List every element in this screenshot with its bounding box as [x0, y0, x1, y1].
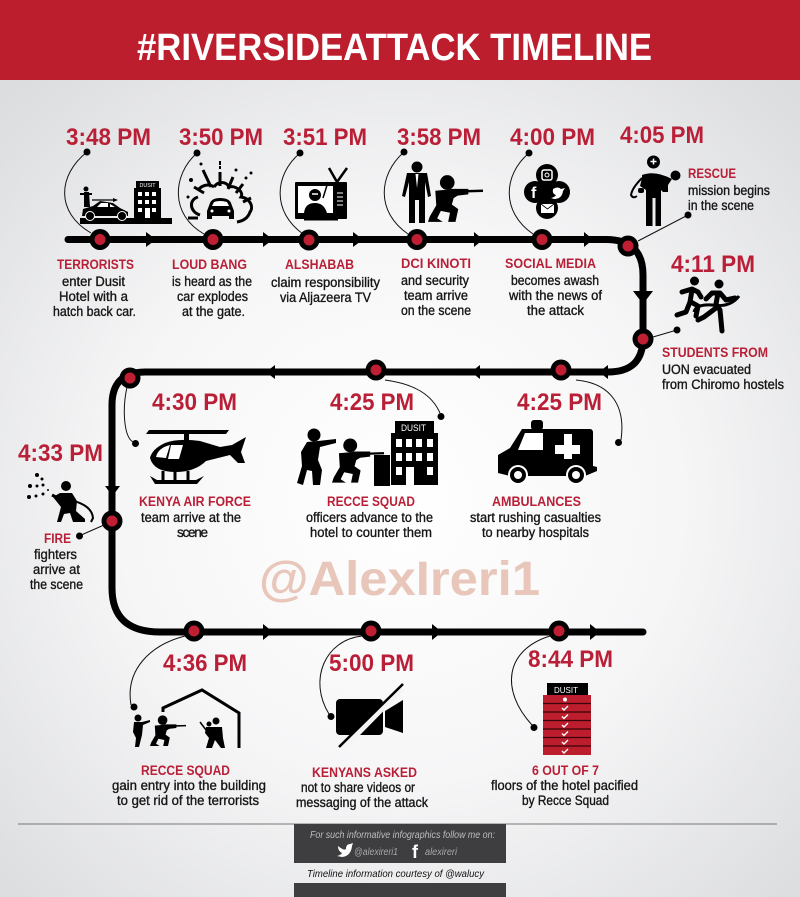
- event: 3:50 PM loud bang: [172, 124, 263, 319]
- icon: ambulance: [498, 420, 597, 485]
- event: 4:33 PM fire fighters: arrive at: [33, 562, 80, 577]
- event: 5:00 PM kenyans asked: [296, 636, 428, 810]
- event: 4:36 PM recce squad: gain entry into the building: [112, 778, 266, 793]
- icon: car and hotel: DUSIT: [140, 183, 156, 189]
- event: 4:11 PM students: UON evacuated: [662, 362, 751, 377]
- event: 4:30 PM kenya air force: team arrive at the: [141, 510, 241, 525]
- event: 3:51 PM alshabab: ALSHABAB: [285, 257, 354, 272]
- footer: social credits: For such informative infographics follow me on:: [310, 829, 495, 841]
- icon: firefighter with hose: [27, 473, 93, 522]
- footer: social credits: alexireri: [425, 847, 458, 858]
- icon: helicopter: [146, 430, 246, 484]
- event: 4:25 PM ambulances: start rushing casualties: [470, 510, 601, 525]
- event: 4:30 PM kenya air force: KENYA AIR FORCE: [139, 494, 251, 509]
- event: 4:36 PM recce squad: to get rid of the terrorists: [117, 793, 259, 808]
- event: 4:33 PM fire fighters: 4:33 PM: [18, 440, 103, 467]
- event: 4:33 PM fire fighters: [18, 440, 104, 592]
- event: 4:36 PM recce squad: [112, 636, 266, 808]
- event: 3:50 PM loud bang: LOUD BANG: [172, 257, 247, 272]
- footer: timeline credit: Timeline information courtesy of @walucy: [307, 868, 485, 880]
- event: 3:48 PM terrorists: [53, 124, 172, 319]
- event: 3:51 PM alshabab: 3:51 PM: [283, 124, 367, 151]
- icon: twitter bird: [337, 843, 353, 857]
- icon: squad entering building: [133, 690, 239, 748]
- icon: social media cluster: [524, 164, 570, 219]
- event: 8:44 PM floors pacified: [491, 636, 638, 808]
- icon: rescuer carrying person: [631, 156, 680, 226]
- icon: suited man and soldier: [402, 162, 483, 223]
- event: 3:58 PM dci kinoti: 3:58 PM: [397, 124, 481, 151]
- event: 4:00 PM social media: 4:00 PM: [510, 124, 595, 151]
- icon: soldiers and hotel: [297, 421, 438, 486]
- event: 3:50 PM loud bang: at the gate.: [182, 304, 245, 319]
- footer: social credits: @alexireri1: [354, 847, 398, 858]
- event: 3:50 PM loud bang: car explodes: [177, 289, 248, 304]
- event: 3:48 PM terrorists: TERRORISTS: [57, 257, 134, 272]
- event: 8:44 PM floors pacified: 6 OUT OF 7: [532, 763, 599, 778]
- timeline path: [68, 240, 643, 632]
- icon: soldiers and hotel: DUSIT: [401, 423, 426, 433]
- event: 4:05 PM rescue: mission begins: [688, 183, 770, 198]
- event: 3:48 PM terrorists: Hotel with a: [59, 289, 128, 304]
- event: 3:58 PM dci kinoti: [384, 124, 483, 318]
- event: 4:30 PM kenya air force: scene: [177, 525, 208, 540]
- event: 4:30 PM kenya air force: [124, 387, 251, 540]
- event: 4:36 PM recce squad: 4:36 PM: [163, 650, 247, 677]
- icon: car and hotel: [80, 181, 172, 224]
- footer divider: [18, 824, 777, 825]
- event: 8:44 PM floors pacified: floors of the hotel pacified: [491, 778, 638, 793]
- event: 4:33 PM fire fighters: FIRE: [44, 531, 71, 546]
- event: 5:00 PM kenyans asked: not to share videos or: [301, 780, 415, 795]
- title: #RIVERSIDEATTACK TIMELINE: [137, 27, 652, 69]
- event: 4:36 PM recce squad: RECCE SQUAD: [141, 763, 230, 778]
- event: 4:00 PM social media: becomes awash: [511, 273, 599, 288]
- event: 4:25 PM ambulances: AMBULANCES: [492, 494, 581, 509]
- event: 3:51 PM alshabab: [271, 124, 380, 305]
- event: 3:48 PM terrorists: enter Dusit: [62, 274, 125, 289]
- event: 3:51 PM alshabab: via Aljazeera TV: [280, 290, 371, 305]
- event: 4:25 PM recce squad: 4:25 PM: [330, 389, 414, 416]
- event: 4:25 PM recce squad: RECCE SQUAD: [327, 494, 415, 509]
- event: 3:50 PM loud bang: is heard as the: [172, 274, 252, 289]
- icon: explosion: [186, 161, 252, 222]
- event: 4:11 PM students: STUDENTS FROM: [662, 345, 768, 360]
- event: 4:05 PM rescue: 4:05 PM: [620, 122, 704, 149]
- event: 4:00 PM social media: [505, 124, 602, 318]
- icon: facebook f: f: [412, 842, 419, 862]
- event: 4:25 PM ambulances: 4:25 PM: [517, 389, 602, 416]
- event: 4:00 PM social media: with the news of: [508, 288, 602, 303]
- event: 3:58 PM dci kinoti: and security: [401, 273, 469, 288]
- footer: bottom bar: [294, 883, 506, 897]
- event: 3:58 PM dci kinoti: DCI KINOTI: [401, 256, 471, 271]
- event: 8:44 PM floors pacified: 8:44 PM: [528, 646, 613, 673]
- event: 3:50 PM loud bang: 3:50 PM: [179, 124, 263, 151]
- event: 4:25 PM ambulances: [470, 380, 622, 540]
- event: 4:25 PM recce squad: officers advance to the: [306, 510, 433, 525]
- event: 3:48 PM terrorists: hatch back car.: [53, 304, 136, 319]
- event: 3:48 PM terrorists: 3:48 PM: [66, 124, 151, 151]
- event: 4:05 PM rescue: [620, 122, 770, 241]
- event: 5:00 PM kenyans asked: messaging of the attack: [296, 795, 428, 810]
- watermark: @AlexIreri1: [259, 553, 540, 606]
- event: 4:00 PM social media: the attack: [527, 303, 584, 318]
- event: 4:11 PM students: [653, 251, 784, 392]
- event: 3:51 PM alshabab: claim responsibility: [271, 275, 380, 290]
- event: 5:00 PM kenyans asked: KENYANS ASKED: [312, 765, 417, 780]
- event: 4:33 PM fire fighters: the scene: [30, 577, 83, 592]
- icon: crossed out video camera: [336, 684, 403, 749]
- event: 4:05 PM rescue: in the scene: [688, 198, 754, 213]
- icon: red hotel with checked floors: [543, 683, 591, 755]
- icon: running students: [677, 276, 739, 331]
- header band: [0, 0, 800, 80]
- footer: social credits: [294, 824, 506, 863]
- event: 8:44 PM floors pacified: by Recce Squad: [522, 793, 609, 808]
- timeline nodes: [90, 229, 654, 642]
- event: 4:25 PM recce squad: [297, 380, 444, 540]
- timeline arrows: [105, 232, 653, 640]
- event: 5:00 PM kenyans asked: 5:00 PM: [329, 650, 414, 677]
- event: 4:25 PM ambulances: to nearby hospitals: [482, 525, 589, 540]
- event: 3:58 PM dci kinoti: on the scene: [401, 303, 471, 318]
- icon: television: [295, 168, 347, 220]
- event: 4:00 PM social media: SOCIAL MEDIA: [505, 256, 596, 271]
- event: 4:11 PM students: from Chiromo hostels: [662, 377, 784, 392]
- event: 4:33 PM fire fighters: fighters: [34, 547, 77, 562]
- event: 4:05 PM rescue: RESCUE: [688, 166, 736, 181]
- event: 3:58 PM dci kinoti: team arrive: [404, 288, 468, 303]
- event: 4:25 PM recce squad: hotel to counter them: [310, 525, 432, 540]
- icon: social media cluster: f: [531, 185, 537, 202]
- event: 4:11 PM students: 4:11 PM: [671, 251, 755, 278]
- event: 4:30 PM kenya air force: 4:30 PM: [152, 389, 237, 416]
- icon: red hotel with checked floors: DUSIT: [554, 685, 578, 695]
